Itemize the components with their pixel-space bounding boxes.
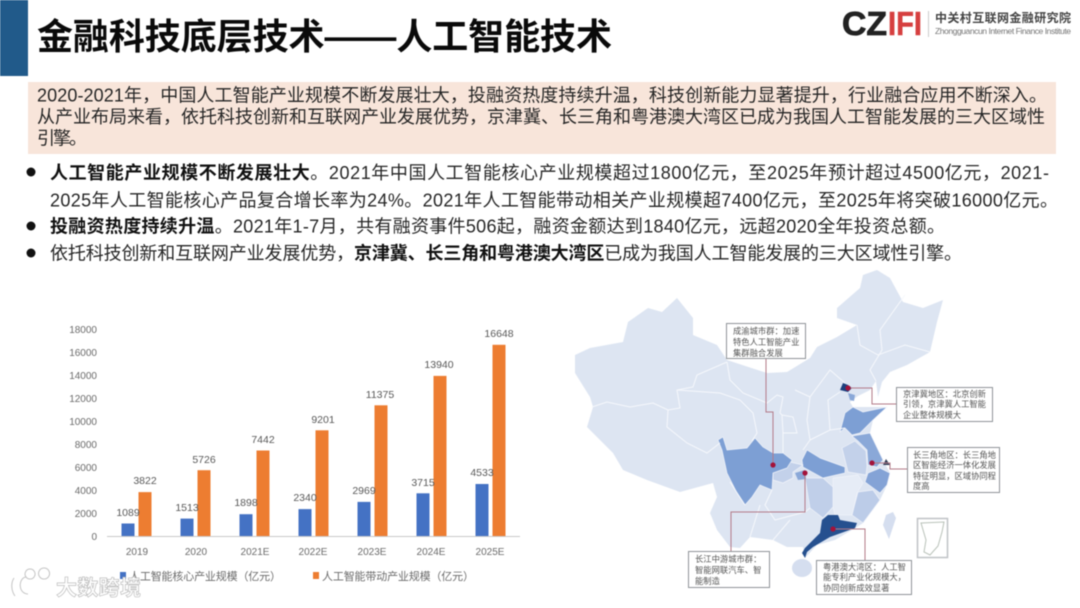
Fujian — [852, 490, 880, 523]
data labels: 4533 — [470, 467, 494, 479]
summary panel: 2020-2021年，中国人工智能产业规模不断发展壮大，投融资热度持续升温，科技创新能力显著提升，行业融合应用不断深入。 — [37, 86, 1047, 106]
data labels: 16648 — [484, 328, 514, 340]
data labels: 3715 — [411, 477, 435, 489]
Zhejiang — [865, 468, 890, 493]
callout: Yangtze River Delta — [908, 448, 1000, 492]
Shanghai — [883, 459, 890, 465]
x axis labels: 2024E — [417, 547, 446, 558]
bullet list: 2025年人工智能核心产品复合增长率为24%。2021年人工智能带动相关产业规模超7400亿元，至2025年将突破16000亿元。 — [50, 190, 1058, 210]
data labels — [116, 328, 514, 519]
Hubei — [802, 450, 845, 478]
leader lines — [731, 358, 907, 560]
callout: Beijing-Tianjin-Hebei: 引领，京津冀人工智能 — [903, 399, 986, 409]
callout: Chengdu-Chongqing: 集群融合发展 — [733, 348, 783, 358]
y axis labels: 0 — [91, 532, 97, 543]
callout: Chengdu-Chongqing: 成渝城市群：加速 — [733, 326, 799, 336]
y axis labels: 4000 — [75, 486, 97, 497]
Shandong — [840, 407, 887, 435]
data labels: 9201 — [311, 414, 335, 426]
logo: CZIFI institute — [842, 5, 1071, 42]
mainland base shape — [575, 270, 943, 558]
Tianjin — [848, 393, 855, 401]
bullet list: 投融资热度持续升温。2021年1-7月，共有融资事件506起，融资金额达到1840亿元，远超2020全年投资总额。 — [50, 216, 945, 236]
data labels: 1089 — [116, 507, 140, 519]
y axis labels — [69, 325, 97, 543]
callout: Greater Bay Area: 能专利产业化规模大， — [823, 572, 906, 582]
data labels: 11375 — [366, 389, 394, 401]
summary panel: 引擎。 — [37, 128, 87, 148]
logo: CZIFI institute: CZ — [842, 5, 887, 42]
data labels: 1898 — [234, 497, 258, 509]
Chongqing and Guizhou link — [773, 462, 803, 483]
bar chart — [69, 325, 520, 583]
Sichuan — [718, 437, 792, 505]
callout: Chengdu-Chongqing — [726, 324, 806, 358]
Anhui — [842, 441, 867, 475]
bullet list: 依托科技创新和互联网产业发展优势，京津冀、长三角和粤港澳大湾区已成为我国人工智能发展的三大区域性引擎。 — [50, 242, 962, 264]
callout: Yangtze River Delta: 度高 — [913, 481, 930, 491]
y axis labels: 10000 — [69, 417, 97, 428]
data labels: 7442 — [251, 434, 275, 446]
callout: Beijing-Tianjin-Hebei: 京津冀地区：北京创新 — [903, 389, 986, 399]
orange related industry bars — [138, 345, 506, 536]
South China Sea inset — [918, 518, 948, 558]
chart legend: 人工智能核心产业规模（亿元） — [129, 569, 281, 583]
Jiangsu — [852, 433, 883, 467]
Hubei west tip — [795, 470, 806, 480]
y axis labels: 8000 — [75, 440, 97, 451]
province boundaries — [592, 295, 930, 540]
data labels: 3822 — [133, 475, 157, 487]
map of China — [575, 270, 1000, 594]
callout: Yangtze River Delta: 长三角地区：长三角地 — [913, 450, 996, 460]
callout: Greater Bay Area: 协同创新成效显著 — [823, 583, 889, 593]
callout: Middle Yangtze — [688, 552, 770, 588]
y axis labels: 2000 — [75, 509, 97, 520]
chart legend: 人工智能带动产业规模（亿元） — [322, 569, 474, 583]
callout: Yangtze River Delta: 特征明显，区域协同程 — [913, 471, 996, 481]
x axis labels: 2022E — [299, 547, 328, 558]
callout: Beijing-Tianjin-Hebei — [896, 388, 992, 422]
y axis labels: 18000 — [69, 325, 97, 336]
y axis labels: 14000 — [69, 371, 97, 382]
x axis labels: 2019 — [126, 547, 149, 558]
callout: Greater Bay Area — [816, 560, 912, 594]
Beijing — [840, 383, 852, 392]
blue core industry bars — [122, 484, 488, 536]
Guangdong — [802, 515, 857, 558]
data labels: 13940 — [424, 359, 454, 371]
data labels: 1513 — [175, 502, 199, 514]
callout: Beijing-Tianjin-Hebei: 企业整体规模大 — [903, 410, 961, 420]
callout: Middle Yangtze: 长江中游城市群： — [695, 554, 761, 564]
x axis labels: 2025E — [476, 547, 505, 558]
Hunan — [805, 478, 833, 518]
data labels: 2969 — [352, 485, 376, 497]
y axis labels: 16000 — [69, 348, 97, 359]
summary panel — [28, 82, 1056, 154]
callout: Chengdu-Chongqing: 特色人工智能产业 — [733, 337, 799, 347]
x axis labels: 2023E — [358, 547, 387, 558]
Taiwan — [883, 512, 896, 539]
header accent bar — [0, 0, 28, 76]
y axis labels: 6000 — [75, 463, 97, 474]
callout: Middle Yangtze: 智能网联汽车、智 — [695, 565, 761, 575]
Jiangxi — [833, 475, 863, 515]
x axis labels — [126, 547, 505, 558]
watermark: 大数跨境 — [56, 577, 141, 600]
watermark — [12, 568, 141, 600]
chart legend — [120, 569, 474, 583]
callout: Middle Yangtze: 能制造 — [695, 576, 721, 586]
bullet list — [26, 162, 1058, 264]
callout: Greater Bay Area: 粤港澳大湾区：人工智 — [823, 562, 906, 572]
summary panel: 从产业布局来看，依托科技创新和互联网产业发展优势，京津冀、长三角和粤港澳大湾区已成为我国人工智能发展的三大区域性 — [37, 107, 1045, 127]
data labels: 5726 — [192, 454, 216, 466]
logo: CZIFI institute: 中关村互联网金融研究院 — [935, 10, 1071, 25]
title: 金融科技底层技术——人工智能技术 — [37, 16, 612, 57]
callout: Yangtze River Delta: 区智能经济一体化发展 — [913, 460, 996, 470]
bullet list: 人工智能产业规模不断发展壮大。2021年中国人工智能核心产业规模超过1800亿元，至2025年预计超过4500亿元，2021- — [50, 162, 1049, 183]
data labels: 2340 — [293, 492, 317, 504]
city cluster markers — [770, 385, 875, 532]
logo: CZIFI institute: IFI — [888, 5, 922, 42]
x axis labels: 2021E — [241, 547, 270, 558]
logo: CZIFI institute: Zhongguancun Internet Finance Institute — [935, 26, 1071, 36]
y axis labels: 12000 — [69, 394, 97, 405]
Hainan — [792, 559, 812, 577]
x axis labels: 2020 — [185, 547, 208, 558]
